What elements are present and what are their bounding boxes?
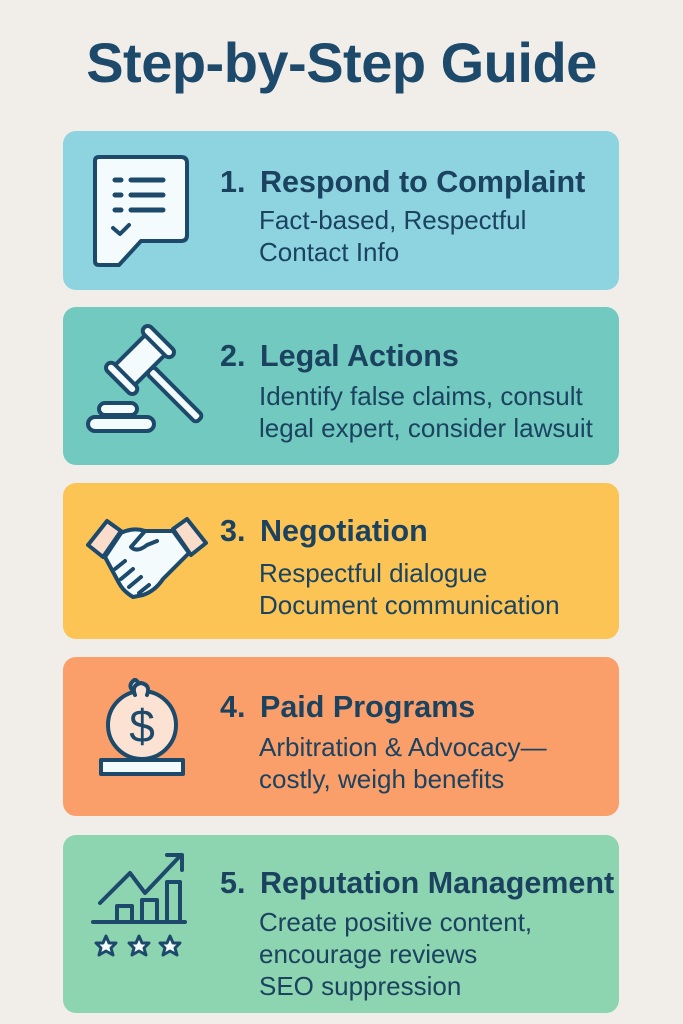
text bbox=[259, 558, 560, 620]
text: costly, weigh benefits bbox=[259, 764, 504, 794]
text: Document communication bbox=[259, 590, 560, 620]
heading: Legal Actions bbox=[260, 339, 459, 373]
heading: Respond to Complaint bbox=[260, 165, 585, 199]
icon: money bag bbox=[99, 678, 185, 776]
heading: 2. bbox=[220, 339, 245, 373]
icon: handshake bbox=[86, 516, 208, 599]
heading: Reputation Management bbox=[260, 866, 614, 900]
icon: money bag: $ bbox=[129, 700, 155, 752]
heading: 4. bbox=[220, 690, 245, 724]
text: legal expert, consider lawsuit bbox=[259, 413, 593, 443]
text bbox=[259, 732, 547, 794]
panel: respond to complaint bbox=[63, 131, 619, 290]
icon: gavel bbox=[86, 324, 204, 433]
panel: legal actions bbox=[63, 307, 619, 465]
text bbox=[259, 907, 532, 1001]
title: Step-by-Step Guide bbox=[86, 31, 597, 94]
text: Arbitration & Advocacy— bbox=[259, 732, 547, 762]
panel: reputation management bbox=[63, 835, 619, 1013]
text: Fact-based, Respectful bbox=[259, 205, 526, 235]
heading: Negotiation bbox=[260, 514, 428, 548]
panel: negotiation bbox=[63, 483, 619, 639]
panel: paid programs bbox=[63, 657, 619, 816]
icon: document checklist bbox=[93, 155, 189, 267]
text bbox=[259, 205, 526, 267]
icon: growth chart with stars bbox=[91, 852, 187, 957]
text bbox=[259, 381, 593, 443]
text: Respectful dialogue bbox=[259, 558, 487, 588]
text: Create positive content, bbox=[259, 907, 532, 937]
text: Contact Info bbox=[259, 237, 399, 267]
text: encourage reviews bbox=[259, 939, 477, 969]
heading: 1. bbox=[220, 165, 245, 199]
text: Identify false claims, consult bbox=[259, 381, 583, 411]
heading: Paid Programs bbox=[260, 690, 475, 724]
heading: 5. bbox=[220, 866, 245, 900]
heading: 3. bbox=[220, 514, 245, 548]
text: SEO suppression bbox=[259, 971, 461, 1001]
